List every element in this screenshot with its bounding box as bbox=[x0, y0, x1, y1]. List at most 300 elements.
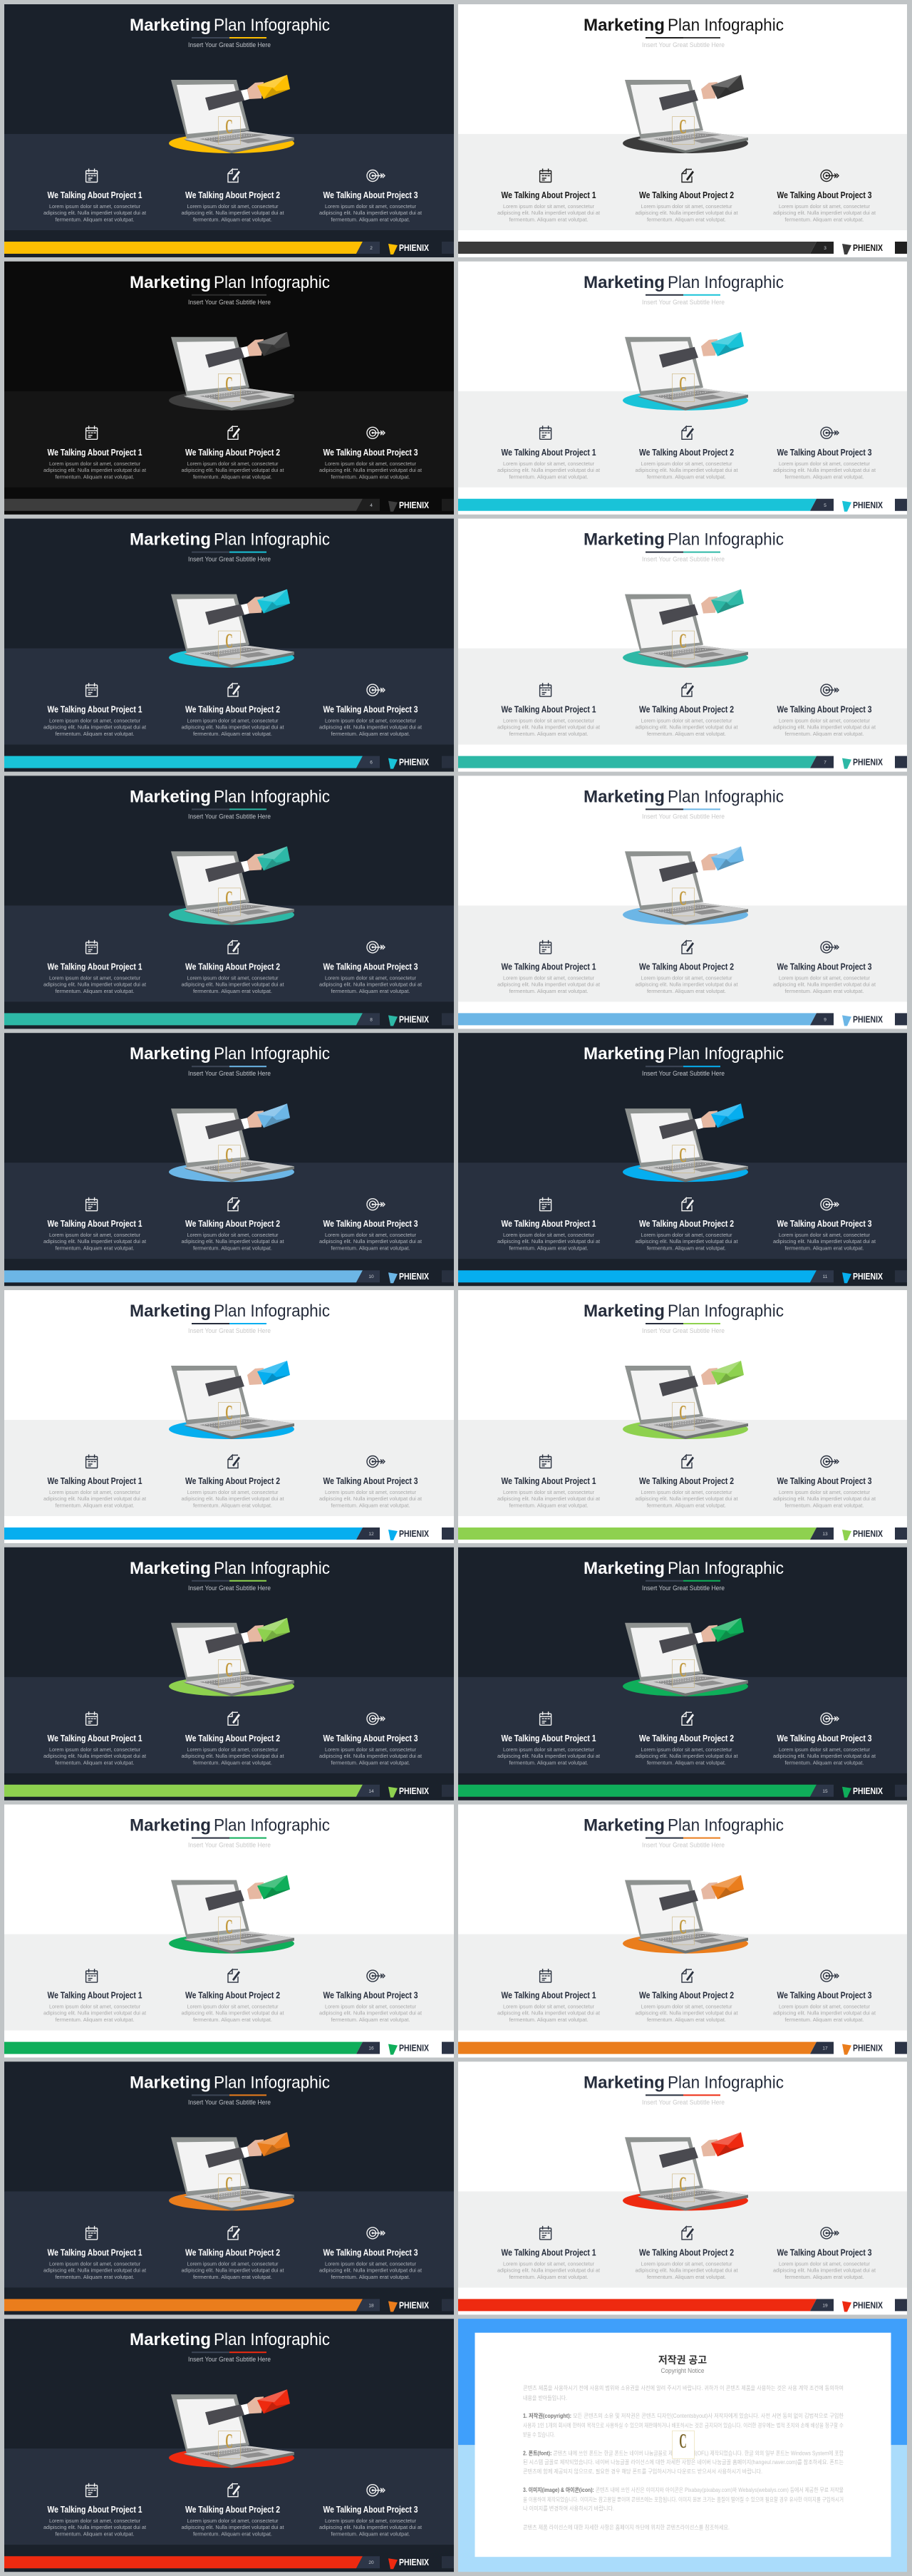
icon: calendar bbox=[540, 1454, 551, 1468]
body text: Lorem ipsum dolor sit amet, consectetur bbox=[503, 2004, 595, 2010]
body text: fermentum. Aliquam erat volutpat. bbox=[509, 731, 589, 737]
footer bar: 7 bbox=[824, 761, 826, 766]
footer bar bbox=[4, 1527, 454, 1540]
body text bbox=[43, 2260, 146, 2280]
body text bbox=[181, 1746, 284, 1766]
column: project 3 bbox=[773, 942, 876, 994]
column: project 3 bbox=[319, 1456, 422, 1508]
title: Marketing bbox=[130, 273, 211, 292]
body text: adipiscing elit. Nulla imperdiet volutpat dui at bbox=[636, 1495, 738, 1502]
icon: note and pencil bbox=[682, 1198, 694, 1211]
heading: We Talking About Project 2 bbox=[639, 1475, 734, 1486]
title bbox=[584, 1302, 784, 1321]
heading: We Talking About Project 1 bbox=[502, 1733, 596, 1743]
heading: We Talking About Project 1 bbox=[502, 704, 596, 715]
laptop illustration: C bbox=[225, 1144, 233, 1167]
body text: Lorem ipsum dolor sit amet, consectetur bbox=[325, 2004, 417, 2010]
icon: calendar bbox=[540, 1197, 551, 1211]
heading: We Talking About Project 1 bbox=[47, 2504, 142, 2515]
footer bar: 12 bbox=[368, 1532, 374, 1537]
body text: fermentum. Aliquam erat volutpat. bbox=[785, 988, 864, 994]
title bbox=[584, 16, 784, 35]
heading: We Talking About Project 2 bbox=[639, 1733, 734, 1743]
title: Plan Infographic bbox=[214, 2330, 330, 2349]
title underline bbox=[646, 552, 720, 553]
body text: fermentum. Aliquam erat volutpat. bbox=[331, 1245, 410, 1252]
laptop illustration: C bbox=[679, 1401, 687, 1423]
laptop illustration bbox=[623, 1618, 748, 1696]
column: project 2 bbox=[636, 684, 738, 737]
body text: Lorem ipsum dolor sit amet, consectetur bbox=[641, 2004, 732, 2010]
panel: slide white red bbox=[458, 2061, 907, 2314]
footer bar: PHIENIX bbox=[853, 1272, 884, 1282]
column: project 3 bbox=[773, 684, 876, 737]
heading: We Talking About Project 2 bbox=[639, 961, 734, 972]
heading: We Talking About Project 2 bbox=[639, 1218, 734, 1229]
column: project 2 bbox=[636, 2227, 738, 2280]
icon: target bbox=[821, 427, 839, 438]
column: project 3 bbox=[319, 2485, 422, 2538]
icon: note and pencil bbox=[228, 2484, 240, 2497]
panel: slide dark soft blue bbox=[4, 1033, 454, 1286]
footer bar bbox=[4, 1013, 454, 1026]
body text: fermentum. Aliquam erat volutpat. bbox=[785, 1759, 864, 1766]
icon: calendar bbox=[540, 2226, 551, 2240]
panel: slide dark cyan bbox=[4, 519, 454, 772]
copyright body text: 콘텐츠 제품 라이선스에 대한 자세한 사항은 홈페이지 하단에 위치한 콘텐츠라이선스를 참조하세요. bbox=[523, 2524, 730, 2531]
icon: calendar bbox=[540, 1711, 551, 1725]
body text: Lorem ipsum dolor sit amet, consectetur bbox=[325, 203, 417, 210]
laptop illustration bbox=[623, 1361, 748, 1439]
panel: slide white soft blue bbox=[458, 776, 907, 1029]
subtitle: Insert Your Great Subtitle Here bbox=[642, 1070, 725, 1077]
heading: We Talking About Project 3 bbox=[323, 1990, 418, 2001]
column: project 2 bbox=[181, 1969, 284, 2023]
heading: We Talking About Project 2 bbox=[639, 1990, 734, 2001]
column: project 2 bbox=[181, 941, 284, 994]
title: Plan Infographic bbox=[214, 787, 330, 806]
icon: target bbox=[367, 2227, 385, 2239]
body text: adipiscing elit. Nulla imperdiet volutpat dui at bbox=[636, 1753, 738, 1759]
subtitle: Insert Your Great Subtitle Here bbox=[642, 2098, 725, 2106]
body text: fermentum. Aliquam erat volutpat. bbox=[331, 473, 410, 480]
panel: slide dark teal bbox=[4, 776, 454, 1029]
body text: fermentum. Aliquam erat volutpat. bbox=[785, 217, 864, 222]
icon: target bbox=[367, 1970, 385, 1982]
body text bbox=[43, 2518, 146, 2538]
body text: Lorem ipsum dolor sit amet, consectetur bbox=[641, 974, 732, 981]
title: Plan Infographic bbox=[668, 1044, 784, 1063]
body text: adipiscing elit. Nulla imperdiet volutpat dui at bbox=[181, 210, 284, 216]
body text: Lorem ipsum dolor sit amet, consectetur bbox=[187, 2260, 279, 2267]
body text: Lorem ipsum dolor sit amet, consectetur bbox=[503, 460, 595, 467]
panel: slide dark green bbox=[458, 1547, 907, 1800]
body text bbox=[773, 1489, 876, 1508]
footer bar bbox=[4, 242, 454, 254]
body text: fermentum. Aliquam erat volutpat. bbox=[56, 2531, 134, 2538]
laptop illustration bbox=[623, 332, 748, 411]
body text bbox=[497, 460, 600, 480]
footer bar: 6 bbox=[370, 761, 373, 766]
heading: We Talking About Project 3 bbox=[777, 2247, 872, 2257]
column: project 3 bbox=[773, 2227, 876, 2280]
panel: slide dark yellow bbox=[4, 4, 454, 257]
body text bbox=[319, 2518, 422, 2538]
body text: Lorem ipsum dolor sit amet, consectetur bbox=[779, 2004, 871, 2010]
body text bbox=[497, 1489, 600, 1508]
body text: adipiscing elit. Nulla imperdiet volutpat dui at bbox=[319, 1495, 422, 1502]
subtitle: Insert Your Great Subtitle Here bbox=[188, 299, 271, 306]
body text: adipiscing elit. Nulla imperdiet volutpat dui at bbox=[636, 2267, 738, 2273]
body text: fermentum. Aliquam erat volutpat. bbox=[647, 2274, 726, 2280]
laptop illustration bbox=[169, 332, 294, 411]
panel: slide white teal bbox=[458, 519, 907, 772]
heading: We Talking About Project 1 bbox=[47, 1218, 142, 1229]
title: Marketing bbox=[584, 787, 665, 806]
column: project 1 bbox=[43, 940, 146, 994]
column: project 2 bbox=[181, 684, 284, 737]
panel: slide dark red bbox=[4, 2319, 454, 2572]
heading: We Talking About Project 2 bbox=[639, 190, 734, 200]
panel: slide white lime bbox=[458, 1290, 907, 1543]
heading: We Talking About Project 3 bbox=[323, 190, 418, 200]
heading: We Talking About Project 2 bbox=[185, 2504, 280, 2515]
title: Plan Infographic bbox=[668, 1559, 784, 1578]
title: Marketing bbox=[130, 2330, 211, 2349]
title underline bbox=[646, 1838, 720, 1839]
laptop illustration bbox=[169, 75, 294, 153]
body text bbox=[319, 1232, 422, 1252]
title: Plan Infographic bbox=[214, 1044, 330, 1063]
column: project 3 bbox=[773, 1970, 876, 2023]
laptop illustration bbox=[169, 846, 294, 924]
body text bbox=[773, 460, 876, 480]
body text: Lorem ipsum dolor sit amet, consectetur bbox=[49, 1746, 141, 1753]
heading: We Talking About Project 3 bbox=[777, 447, 872, 458]
subtitle: Insert Your Great Subtitle Here bbox=[642, 1327, 725, 1334]
body text: fermentum. Aliquam erat volutpat. bbox=[647, 1245, 726, 1252]
column: project 1 bbox=[497, 1969, 600, 2023]
icon: calendar bbox=[540, 1969, 551, 1982]
body text: Lorem ipsum dolor sit amet, consectetur bbox=[187, 974, 279, 981]
laptop illustration: C bbox=[679, 887, 687, 910]
title underline bbox=[192, 1838, 266, 1839]
subtitle: Insert Your Great Subtitle Here bbox=[188, 813, 271, 820]
footer bar: 5 bbox=[824, 503, 826, 508]
subtitle: Insert Your Great Subtitle Here bbox=[188, 2356, 271, 2363]
body text: Lorem ipsum dolor sit amet, consectetur bbox=[641, 2260, 732, 2267]
title underline bbox=[192, 1323, 266, 1324]
body text: Lorem ipsum dolor sit amet, consectetur bbox=[503, 718, 595, 724]
body text: adipiscing elit. Nulla imperdiet volutpat dui at bbox=[181, 981, 284, 987]
panel: copyright notice bbox=[458, 2319, 907, 2572]
subtitle: Insert Your Great Subtitle Here bbox=[188, 1327, 271, 1334]
title: Plan Infographic bbox=[214, 530, 330, 550]
panel: slide white orange bbox=[458, 1805, 907, 2058]
icon: target bbox=[821, 1199, 839, 1210]
footer bar bbox=[458, 499, 907, 512]
title: Marketing bbox=[130, 1302, 211, 1321]
heading: We Talking About Project 2 bbox=[185, 2247, 280, 2257]
column: project 1 bbox=[497, 2226, 600, 2280]
body text bbox=[319, 2260, 422, 2280]
heading: We Talking About Project 2 bbox=[185, 447, 280, 458]
column: project 2 bbox=[636, 426, 738, 480]
title: Marketing bbox=[584, 530, 665, 550]
column: project 1 bbox=[43, 683, 146, 737]
icon: calendar bbox=[86, 2483, 98, 2497]
body text: Lorem ipsum dolor sit amet, consectetur bbox=[503, 2260, 595, 2267]
column: project 3 bbox=[319, 2227, 422, 2280]
body text: adipiscing elit. Nulla imperdiet volutpat dui at bbox=[43, 210, 146, 216]
laptop illustration: C bbox=[679, 115, 687, 138]
body text: adipiscing elit. Nulla imperdiet volutpat dui at bbox=[43, 2010, 146, 2016]
laptop illustration bbox=[623, 846, 748, 924]
footer bar: PHIENIX bbox=[399, 2300, 430, 2310]
body text: adipiscing elit. Nulla imperdiet volutpat dui at bbox=[497, 467, 600, 473]
footer bar: PHIENIX bbox=[853, 500, 884, 510]
laptop illustration: C bbox=[225, 373, 233, 395]
footer bar: PHIENIX bbox=[399, 2044, 430, 2054]
body text: Lorem ipsum dolor sit amet, consectetur bbox=[187, 1746, 279, 1753]
body text: fermentum. Aliquam erat volutpat. bbox=[509, 1245, 589, 1252]
icon: target bbox=[821, 1456, 839, 1467]
footer bar: 15 bbox=[822, 1789, 828, 1794]
laptop illustration: C bbox=[225, 1659, 233, 1681]
icon: target bbox=[367, 942, 385, 953]
heading: We Talking About Project 1 bbox=[47, 1733, 142, 1743]
icon: target bbox=[367, 1713, 385, 1724]
body text bbox=[636, 2004, 738, 2023]
footer bar: PHIENIX bbox=[853, 2044, 884, 2054]
icon: note and pencil bbox=[682, 1456, 694, 1468]
panel: slide white bright blue bbox=[4, 1290, 454, 1543]
footer bar bbox=[4, 2299, 454, 2312]
column: project 2 bbox=[181, 426, 284, 480]
column: project 3 bbox=[773, 427, 876, 480]
body text bbox=[773, 1232, 876, 1252]
watermark C: C bbox=[679, 2430, 687, 2453]
body text: fermentum. Aliquam erat volutpat. bbox=[56, 1245, 134, 1252]
laptop illustration: C bbox=[679, 373, 687, 395]
footer bar bbox=[458, 2042, 907, 2055]
heading: We Talking About Project 3 bbox=[323, 1733, 418, 1743]
laptop illustration bbox=[169, 2132, 294, 2210]
body text: adipiscing elit. Nulla imperdiet volutpat dui at bbox=[636, 724, 738, 731]
column: project 1 bbox=[43, 2226, 146, 2280]
icon: target bbox=[367, 2485, 385, 2496]
column: project 3 bbox=[319, 1970, 422, 2023]
heading: We Talking About Project 2 bbox=[185, 961, 280, 972]
column: project 3 bbox=[773, 1199, 876, 1252]
laptop illustration: C bbox=[679, 1659, 687, 1681]
body text: fermentum. Aliquam erat volutpat. bbox=[193, 2274, 272, 2280]
body text: adipiscing elit. Nulla imperdiet volutpat dui at bbox=[43, 467, 146, 473]
subtitle: Insert Your Great Subtitle Here bbox=[188, 2098, 271, 2106]
icon: target bbox=[821, 942, 839, 953]
laptop illustration bbox=[169, 1103, 294, 1182]
title bbox=[130, 273, 330, 292]
body text: adipiscing elit. Nulla imperdiet volutpat dui at bbox=[773, 2267, 876, 2273]
column: project 2 bbox=[181, 2484, 284, 2538]
laptop illustration bbox=[623, 1875, 748, 1954]
body text bbox=[636, 974, 738, 994]
title: Marketing bbox=[130, 2073, 211, 2092]
body text: adipiscing elit. Nulla imperdiet volutpat dui at bbox=[319, 1753, 422, 1759]
footer bar: 9 bbox=[824, 1017, 826, 1022]
title: Plan Infographic bbox=[668, 16, 784, 35]
column: project 3 bbox=[773, 170, 876, 222]
title: Marketing bbox=[130, 1816, 211, 1835]
body text: Lorem ipsum dolor sit amet, consectetur bbox=[187, 203, 279, 210]
subtitle: Insert Your Great Subtitle Here bbox=[188, 41, 271, 48]
heading: We Talking About Project 2 bbox=[185, 1733, 280, 1743]
column: project 3 bbox=[319, 1713, 422, 1766]
body text: Lorem ipsum dolor sit amet, consectetur bbox=[187, 2004, 279, 2010]
footer bar bbox=[4, 756, 454, 769]
body text bbox=[43, 1746, 146, 1766]
footer bar: PHIENIX bbox=[399, 2557, 430, 2567]
title underline bbox=[192, 2351, 266, 2353]
body text: fermentum. Aliquam erat volutpat. bbox=[647, 473, 726, 480]
body text: fermentum. Aliquam erat volutpat. bbox=[331, 731, 410, 737]
title: Plan Infographic bbox=[214, 1302, 330, 1321]
body text bbox=[43, 718, 146, 737]
body text: fermentum. Aliquam erat volutpat. bbox=[647, 217, 726, 222]
body text: fermentum. Aliquam erat volutpat. bbox=[509, 2274, 589, 2280]
icon: calendar bbox=[86, 940, 98, 954]
heading: We Talking About Project 2 bbox=[185, 1990, 280, 2001]
body text: adipiscing elit. Nulla imperdiet volutpat dui at bbox=[43, 1753, 146, 1759]
footer bar bbox=[458, 756, 907, 769]
title bbox=[584, 1044, 784, 1063]
title bbox=[130, 1559, 330, 1578]
footer bar: PHIENIX bbox=[853, 2300, 884, 2310]
body text bbox=[497, 2004, 600, 2023]
body text bbox=[773, 1746, 876, 1766]
body text bbox=[181, 1489, 284, 1508]
column: project 1 bbox=[497, 168, 600, 222]
title: Marketing bbox=[584, 2073, 665, 2092]
column: project 2 bbox=[181, 170, 284, 222]
body text: adipiscing elit. Nulla imperdiet volutpat dui at bbox=[181, 1753, 284, 1759]
column: project 1 bbox=[43, 168, 146, 222]
body text bbox=[319, 1746, 422, 1766]
body text: Lorem ipsum dolor sit amet, consectetur bbox=[779, 1746, 871, 1753]
body text: Lorem ipsum dolor sit amet, consectetur bbox=[325, 718, 417, 724]
body text: adipiscing elit. Nulla imperdiet volutpat dui at bbox=[773, 1238, 876, 1245]
body text: Lorem ipsum dolor sit amet, consectetur bbox=[325, 2518, 417, 2524]
body text: fermentum. Aliquam erat volutpat. bbox=[509, 217, 589, 222]
title: Marketing bbox=[584, 273, 665, 292]
heading: We Talking About Project 1 bbox=[47, 2247, 142, 2257]
title bbox=[130, 2073, 330, 2092]
body text: adipiscing elit. Nulla imperdiet volutpat dui at bbox=[773, 724, 876, 731]
body text: fermentum. Aliquam erat volutpat. bbox=[56, 988, 134, 994]
body text: adipiscing elit. Nulla imperdiet volutpat dui at bbox=[43, 2267, 146, 2273]
icon: note and pencil bbox=[228, 2227, 240, 2240]
body text: fermentum. Aliquam erat volutpat. bbox=[193, 1245, 272, 1252]
body text: Lorem ipsum dolor sit amet, consectetur bbox=[641, 718, 732, 724]
title underline bbox=[646, 1066, 720, 1067]
footer bar: PHIENIX bbox=[853, 1786, 884, 1796]
body text: adipiscing elit. Nulla imperdiet volutpat dui at bbox=[497, 210, 600, 216]
body text: adipiscing elit. Nulla imperdiet volutpat dui at bbox=[497, 2010, 600, 2016]
panel: slide dark lime bbox=[4, 1547, 454, 1800]
icon: note and pencil bbox=[682, 426, 694, 439]
title: Marketing bbox=[584, 16, 665, 35]
copyright body text bbox=[523, 2384, 844, 2531]
title: Marketing bbox=[584, 1044, 665, 1063]
body text: fermentum. Aliquam erat volutpat. bbox=[56, 1759, 134, 1766]
title underline bbox=[192, 1066, 266, 1067]
body text: adipiscing elit. Nulla imperdiet volutpat dui at bbox=[497, 2267, 600, 2273]
heading: We Talking About Project 1 bbox=[47, 190, 142, 200]
body text bbox=[181, 460, 284, 480]
title underline bbox=[192, 808, 266, 810]
body text: Lorem ipsum dolor sit amet, consectetur bbox=[503, 974, 595, 981]
icon: note and pencil bbox=[228, 426, 240, 439]
heading: We Talking About Project 3 bbox=[777, 1990, 872, 2001]
footer bar: 3 bbox=[824, 246, 826, 251]
copyright body text: 된 시스템 글꼴로 제작되었습니다. 네이버 나눔글꼴 라이선스에 대한 자세한 사항은 네이버 나눔글꼴 홈페이지(hangeul.naver.com)를 참조하세요. 폰트는 bbox=[523, 2458, 844, 2466]
title: Marketing bbox=[584, 1559, 665, 1578]
title: Plan Infographic bbox=[214, 273, 330, 292]
laptop illustration bbox=[623, 1103, 748, 1182]
heading: We Talking About Project 1 bbox=[502, 1990, 596, 2001]
heading: We Talking About Project 2 bbox=[185, 1218, 280, 1229]
body text: fermentum. Aliquam erat volutpat. bbox=[509, 473, 589, 480]
title underline bbox=[192, 294, 266, 296]
panel: slide white charcoal bbox=[458, 4, 907, 257]
title underline bbox=[192, 552, 266, 553]
body text: adipiscing elit. Nulla imperdiet volutpat dui at bbox=[773, 1495, 876, 1502]
body text: adipiscing elit. Nulla imperdiet volutpat dui at bbox=[319, 981, 422, 987]
laptop illustration: C bbox=[679, 1915, 687, 1938]
icon: calendar bbox=[86, 1197, 98, 1211]
title bbox=[130, 530, 330, 550]
body text: adipiscing elit. Nulla imperdiet volutpat dui at bbox=[319, 724, 422, 731]
panel: slide white green bbox=[4, 1805, 454, 2058]
body text: adipiscing elit. Nulla imperdiet volutpat dui at bbox=[319, 2524, 422, 2530]
body text: Lorem ipsum dolor sit amet, consectetur bbox=[779, 2260, 871, 2267]
column: project 1 bbox=[43, 1454, 146, 1508]
title bbox=[130, 1816, 330, 1835]
title: Plan Infographic bbox=[668, 2073, 784, 2092]
icon: note and pencil bbox=[682, 1969, 694, 1982]
title: Plan Infographic bbox=[214, 16, 330, 35]
body text: fermentum. Aliquam erat volutpat. bbox=[331, 2531, 410, 2538]
column: project 2 bbox=[181, 2227, 284, 2280]
body text: adipiscing elit. Nulla imperdiet volutpat dui at bbox=[181, 1238, 284, 1245]
icon: note and pencil bbox=[228, 170, 240, 182]
body text: adipiscing elit. Nulla imperdiet volutpat dui at bbox=[181, 1495, 284, 1502]
title bbox=[584, 787, 784, 806]
title bbox=[130, 2330, 330, 2349]
body text: fermentum. Aliquam erat volutpat. bbox=[193, 2531, 272, 2538]
laptop illustration bbox=[169, 1875, 294, 1954]
copyright body text: 받을 수 있습니다. bbox=[523, 2431, 555, 2438]
body text: fermentum. Aliquam erat volutpat. bbox=[647, 988, 726, 994]
icon: calendar bbox=[86, 683, 98, 696]
column: project 3 bbox=[319, 942, 422, 994]
title underline bbox=[646, 2094, 720, 2096]
subtitle: Insert Your Great Subtitle Here bbox=[642, 299, 725, 306]
body text: Lorem ipsum dolor sit amet, consectetur bbox=[641, 1232, 732, 1238]
body text: adipiscing elit. Nulla imperdiet volutpat dui at bbox=[319, 2010, 422, 2016]
heading: We Talking About Project 3 bbox=[777, 961, 872, 972]
body text: adipiscing elit. Nulla imperdiet volutpat dui at bbox=[43, 2524, 146, 2530]
